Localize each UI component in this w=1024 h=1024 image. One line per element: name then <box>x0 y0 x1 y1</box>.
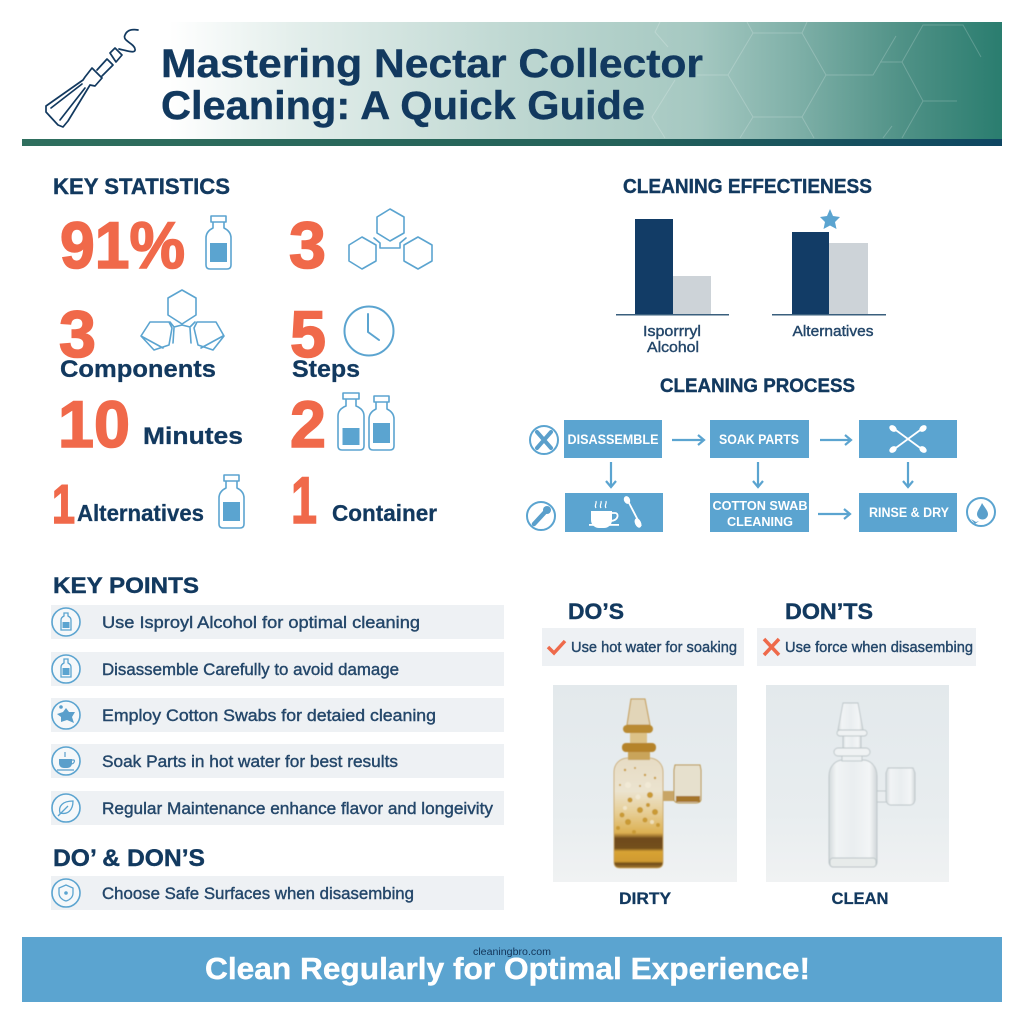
icon: bottle <box>206 216 231 269</box>
heading: cleaning process: CLEANING PROCESS <box>660 375 855 397</box>
process box: cotton swab cleaning <box>710 493 809 532</box>
key point 2: Disassemble Carefully to avoid damage <box>102 660 399 679</box>
process box: soak parts: SOAK PARTS <box>719 432 799 447</box>
stat: 1 container: Container <box>332 500 437 526</box>
icon: molecule hexagons <box>349 209 432 269</box>
stat: 10 minutes <box>58 387 243 461</box>
process arrows <box>606 435 913 519</box>
heading: cleaning effectiveness: CLEANING EFFECTIENESS <box>623 176 872 198</box>
stat: 10 minutes: 10 <box>58 387 130 461</box>
process box: rinse and dry: RINSE & DRY <box>869 505 949 520</box>
key point 4: Soak Parts in hot water for best results <box>102 752 398 771</box>
icon: tools circle <box>530 426 558 454</box>
header rule <box>22 139 1002 146</box>
heading: do and don't: DO’ & DON’S <box>53 845 205 872</box>
key point 1 <box>51 605 504 639</box>
stat: 3: 3 <box>289 208 326 282</box>
bar chart: isopropyl alcohol: Alcohol <box>647 339 699 356</box>
stat: 1 container <box>291 463 437 537</box>
do item <box>542 628 744 666</box>
key point 3 <box>51 698 504 732</box>
footer banner: cleaningbro.com <box>473 947 551 958</box>
process box: rinse and dry <box>859 493 957 532</box>
bar chart: alternatives <box>772 232 886 340</box>
don't item: Use force when disasembing <box>785 639 973 656</box>
stat: 10 minutes: Minutes <box>143 423 243 450</box>
header banner <box>22 22 1002 140</box>
title <box>161 42 703 128</box>
title: Cleaning: A Quick Guide <box>161 84 645 128</box>
icon: nectar collector <box>46 30 138 127</box>
process box: cup and swab <box>565 493 663 532</box>
label: clean: CLEAN <box>832 889 888 908</box>
icon: bottle <box>219 475 244 528</box>
stat: 1 alternatives: Alternatives <box>77 500 204 526</box>
key point 5: Regular Maintenance enhance flavor and longeivity <box>102 799 494 818</box>
process box: disassemble: DISASSEMBLE <box>568 432 658 447</box>
footer banner <box>22 937 1002 1002</box>
bar chart: alternatives: Alternatives <box>792 323 874 340</box>
key point 3: Employ Cotton Swabs for detaied cleaning <box>102 706 436 725</box>
icon: star <box>820 209 840 229</box>
key point 5 <box>51 791 504 825</box>
stat: 1 alternatives <box>52 473 204 535</box>
don't item <box>757 628 976 666</box>
title: Mastering Nectar Collector <box>161 42 703 86</box>
stat: 2: 2 <box>290 387 326 461</box>
process box: disassemble <box>564 420 662 458</box>
do item: Use hot water for soaking <box>571 639 737 656</box>
key point 2 <box>51 652 504 686</box>
photo: clean bottle <box>766 685 949 882</box>
icon: clock <box>344 306 394 356</box>
heading: key statistics: KEY STATISTICS <box>53 174 230 199</box>
key point 1: Use Isproyl Alcohol for optimal cleaning <box>102 613 420 632</box>
heading: key points: KEY POINTS <box>53 573 199 598</box>
process box: cotton swab cleaning: COTTON SWAB <box>712 498 808 513</box>
stat: 3 components: Components <box>60 356 216 383</box>
bar chart: isopropyl alcohol: Isporrryl <box>643 323 701 340</box>
icon: wrench circle <box>527 502 555 530</box>
process box: cotton swabs icon <box>859 420 957 458</box>
process box: cotton swab cleaning: CLEANING <box>727 514 793 529</box>
icon: water drop circle <box>967 498 995 526</box>
key point 6: Choose Safe Surfaces when disasembing <box>102 884 414 903</box>
icon: two bottles <box>338 393 394 450</box>
stat: 3 components <box>59 297 216 383</box>
stat: 91%: 91% <box>60 208 185 282</box>
bar chart: isopropyl alcohol <box>616 219 729 356</box>
footer banner: Clean Regularly for Optimal Experience! <box>205 951 810 986</box>
label: dirty: DIRTY <box>619 889 672 908</box>
stat: 5 steps: 5 <box>290 297 326 371</box>
stat: 1 alternatives: 1 <box>52 473 75 535</box>
key point 4 <box>51 744 504 778</box>
photo: dirty bottle <box>553 685 737 882</box>
stat: 5 steps: Steps <box>292 356 360 383</box>
stat: 1 container: 1 <box>291 463 317 537</box>
stat: 5 steps <box>290 297 360 383</box>
process box: soak parts <box>710 420 809 458</box>
key point 6 <box>51 876 504 910</box>
heading: don'ts: DON’TS <box>785 599 873 624</box>
icon: component hexagons <box>141 290 224 350</box>
stat: 3 components: 3 <box>59 297 96 371</box>
heading: do's: DO’S <box>568 599 624 624</box>
